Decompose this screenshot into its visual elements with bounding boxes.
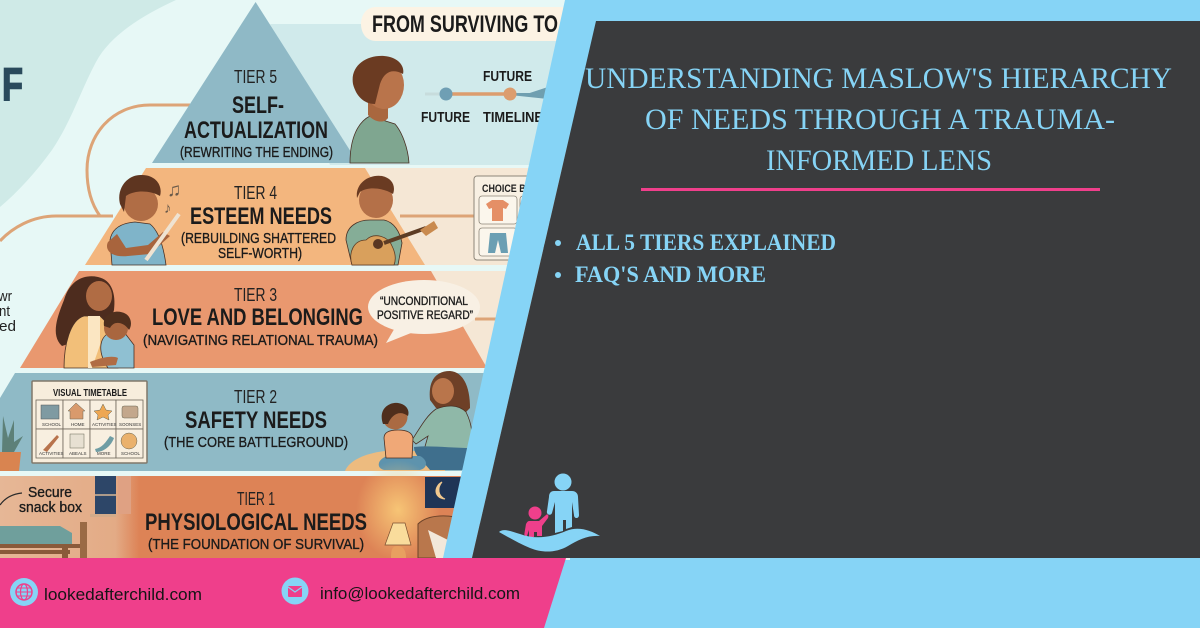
tier 1 panel: physiological needs: PHYSIOLOGICAL NEEDS [145, 509, 367, 536]
tier 4 panel: esteem needs: (REBUILDING SHATTERED [181, 230, 336, 247]
title [585, 62, 1172, 177]
tier 2 panel: safety needs [0, 373, 485, 471]
cropped left note [0, 288, 16, 335]
tier 5 panel: self-actualization: TIER 5 [234, 67, 277, 87]
tier 2 panel: safety needs: TIER 2 [234, 387, 277, 407]
bullet list: FAQ'S AND MORE [575, 262, 766, 287]
bedroom scene: window and bed [0, 476, 131, 558]
future timeline [421, 68, 548, 126]
figure: boy with recorder and music notes [107, 175, 181, 265]
tier 1 panel: physiological needs: TIER 1 [237, 489, 275, 509]
title: OF NEEDS THROUGH A TRAUMA- [645, 103, 1115, 136]
figure: boy looking to the future [350, 56, 409, 163]
visual timetable: ACTIVITIES [92, 422, 117, 427]
tier 4 panel: esteem needs: SELF-WORTH) [218, 245, 302, 262]
future timeline: TIMELINE [483, 109, 543, 126]
choice board [474, 176, 552, 260]
pink title underline [641, 188, 1100, 191]
figure: boy with recorder and music notes: ♫ [167, 180, 181, 201]
visual timetable [32, 381, 147, 463]
tier 4 panel: esteem needs [85, 168, 425, 265]
tier 4 panel: esteem needs: ESTEEM NEEDS [190, 203, 332, 230]
tier 5 panel: self-actualization [152, 2, 358, 163]
tier 2 panel: safety needs: (THE CORE BATTLEGROUND) [164, 434, 348, 451]
title: UNDERSTANDING MASLOW'S HIERARCHY [585, 62, 1172, 95]
note: secure snack box: snack box [19, 499, 82, 516]
visual timetable: VISUAL TIMETABLE [53, 387, 127, 399]
blue diagonal strip and top band [443, 0, 1200, 558]
tier 2 panel: safety needs: SAFETY NEEDS [185, 407, 327, 434]
banner: from surviving to [361, 7, 570, 41]
bedroom scene: lamp, night picture and bed [385, 477, 467, 558]
icon: globe [10, 578, 38, 606]
visual timetable: ABEALS [69, 451, 87, 456]
website address: lookedafterchild.com [44, 585, 202, 604]
speech bubble: unconditional positive regard [368, 280, 480, 343]
footer: pink contact bar [0, 558, 566, 628]
speech bubble: unconditional positive regard: POSITIVE REGARD” [377, 308, 473, 322]
tier 3 panel: love and belonging [20, 271, 487, 368]
visual timetable: HOME [71, 422, 84, 427]
tier 5 panel: self-actualization: ACTUALIZATION [184, 117, 328, 144]
future timeline: FUTURE [483, 68, 532, 85]
figure: boy with recorder and music notes: ♪ [164, 200, 172, 217]
visual timetable: MORE [97, 451, 110, 456]
visual timetable: SCHOOL [121, 451, 141, 456]
figure: mother sitting with child on rug [345, 371, 472, 471]
visual timetable: SCHOOL [42, 422, 62, 427]
connecting orange path lines [0, 105, 500, 319]
icon: potted plant [0, 416, 23, 471]
banner: from surviving to: FROM SURVIVING TO [372, 11, 558, 38]
tier 3 panel: love and belonging: (NAVIGATING RELATIONAL TRAUMA) [143, 332, 378, 349]
bullet list [555, 230, 836, 287]
note: secure snack box [0, 484, 82, 516]
tier 3 panel: love and belonging: LOVE AND BELONGING [152, 304, 363, 331]
icon: adult and child logo [499, 474, 600, 552]
bullet list: ALL 5 TIERS EXPLAINED [576, 230, 836, 255]
speech bubble: unconditional positive regard: “UNCONDITIONAL [380, 294, 468, 308]
tier 4 panel: esteem needs: TIER 4 [234, 183, 277, 203]
background: pyramid illustration backdrop [0, 0, 570, 560]
tier 5 panel: self-actualization: SELF- [232, 92, 284, 119]
future timeline: FUTURE [421, 109, 470, 126]
visual timetable: SOONSES [119, 422, 141, 427]
icon: envelope [282, 578, 308, 604]
tier 5 panel: self-actualization: (REWRITING THE ENDING) [180, 144, 333, 161]
note: secure snack box: Secure [28, 484, 72, 501]
email address: info@lookedafterchild.com [320, 584, 520, 603]
title: INFORMED LENS [766, 144, 992, 177]
figure: boy with guitar [346, 176, 438, 265]
panel: dark title background [472, 21, 1200, 558]
visual timetable: ACTIVITIES [39, 451, 64, 456]
cropped left heading letter: F [2, 58, 23, 110]
tier 3 panel: love and belonging: TIER 3 [234, 285, 277, 305]
tier 1 panel: physiological needs [0, 460, 480, 560]
tier 1 panel: physiological needs: (THE FOUNDATION OF SURVIVAL) [148, 536, 364, 553]
figure: mother holding child [56, 276, 134, 368]
choice board: CHOICE BOARD [482, 183, 552, 195]
